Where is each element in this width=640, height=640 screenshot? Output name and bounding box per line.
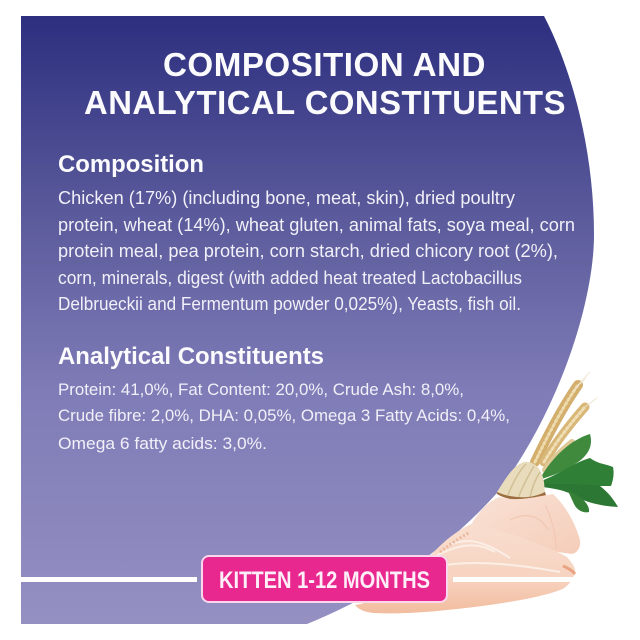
title: COMPOSITION AND — [163, 46, 486, 83]
icon: upper chicken breast — [472, 494, 580, 554]
text block: analytical constituents: Omega 6 fatty acids: 3,0%. — [58, 435, 267, 453]
text block: analytical constituents: Crude fibre: 2,0%, DHA: 0,05%, Omega 3 Fatty Acids: 0,4%, — [58, 407, 510, 425]
badge: kitten age: KITTEN 1-12 MONTHS — [219, 567, 430, 594]
title — [84, 46, 566, 121]
illustration: chicken, root, wheat and leaves — [355, 372, 618, 613]
icon: green leaves — [541, 434, 618, 512]
badge: kitten age — [202, 556, 447, 602]
divider line right — [453, 577, 576, 582]
title: ANALYTICAL CONSTITUENTS — [84, 84, 566, 121]
text block: composition — [58, 188, 575, 314]
text block: composition: protein meal, pea protein, corn starch, dried chicory root (2%), — [58, 241, 558, 261]
text block: analytical constituents: Protein: 41,0%, Fat Content: 20,0%, Crude Ash: 8,0%, — [58, 381, 464, 399]
icon: wheat ears — [535, 372, 597, 470]
text block: composition: Delbrueckii and Fermentum powder 0,025%), Yeasts, fish oil. — [58, 294, 521, 314]
text block: composition: protein, wheat (14%), wheat gluten, animal fats, soya meal, corn — [58, 215, 575, 235]
text block: composition: Chicken (17%) (including bone, meat, skin), dried poultry — [58, 188, 515, 208]
divider line left — [21, 577, 197, 582]
icon: parsnip root — [497, 462, 546, 500]
text block: composition: corn, minerals, digest (with added heat treated Lactobacillus — [58, 268, 522, 288]
heading: analytical constituents: Analytical Constituents — [58, 343, 324, 370]
heading: composition: Composition — [58, 151, 204, 178]
text block: analytical constituents — [58, 381, 510, 453]
icon: lower chicken breast — [355, 523, 575, 613]
